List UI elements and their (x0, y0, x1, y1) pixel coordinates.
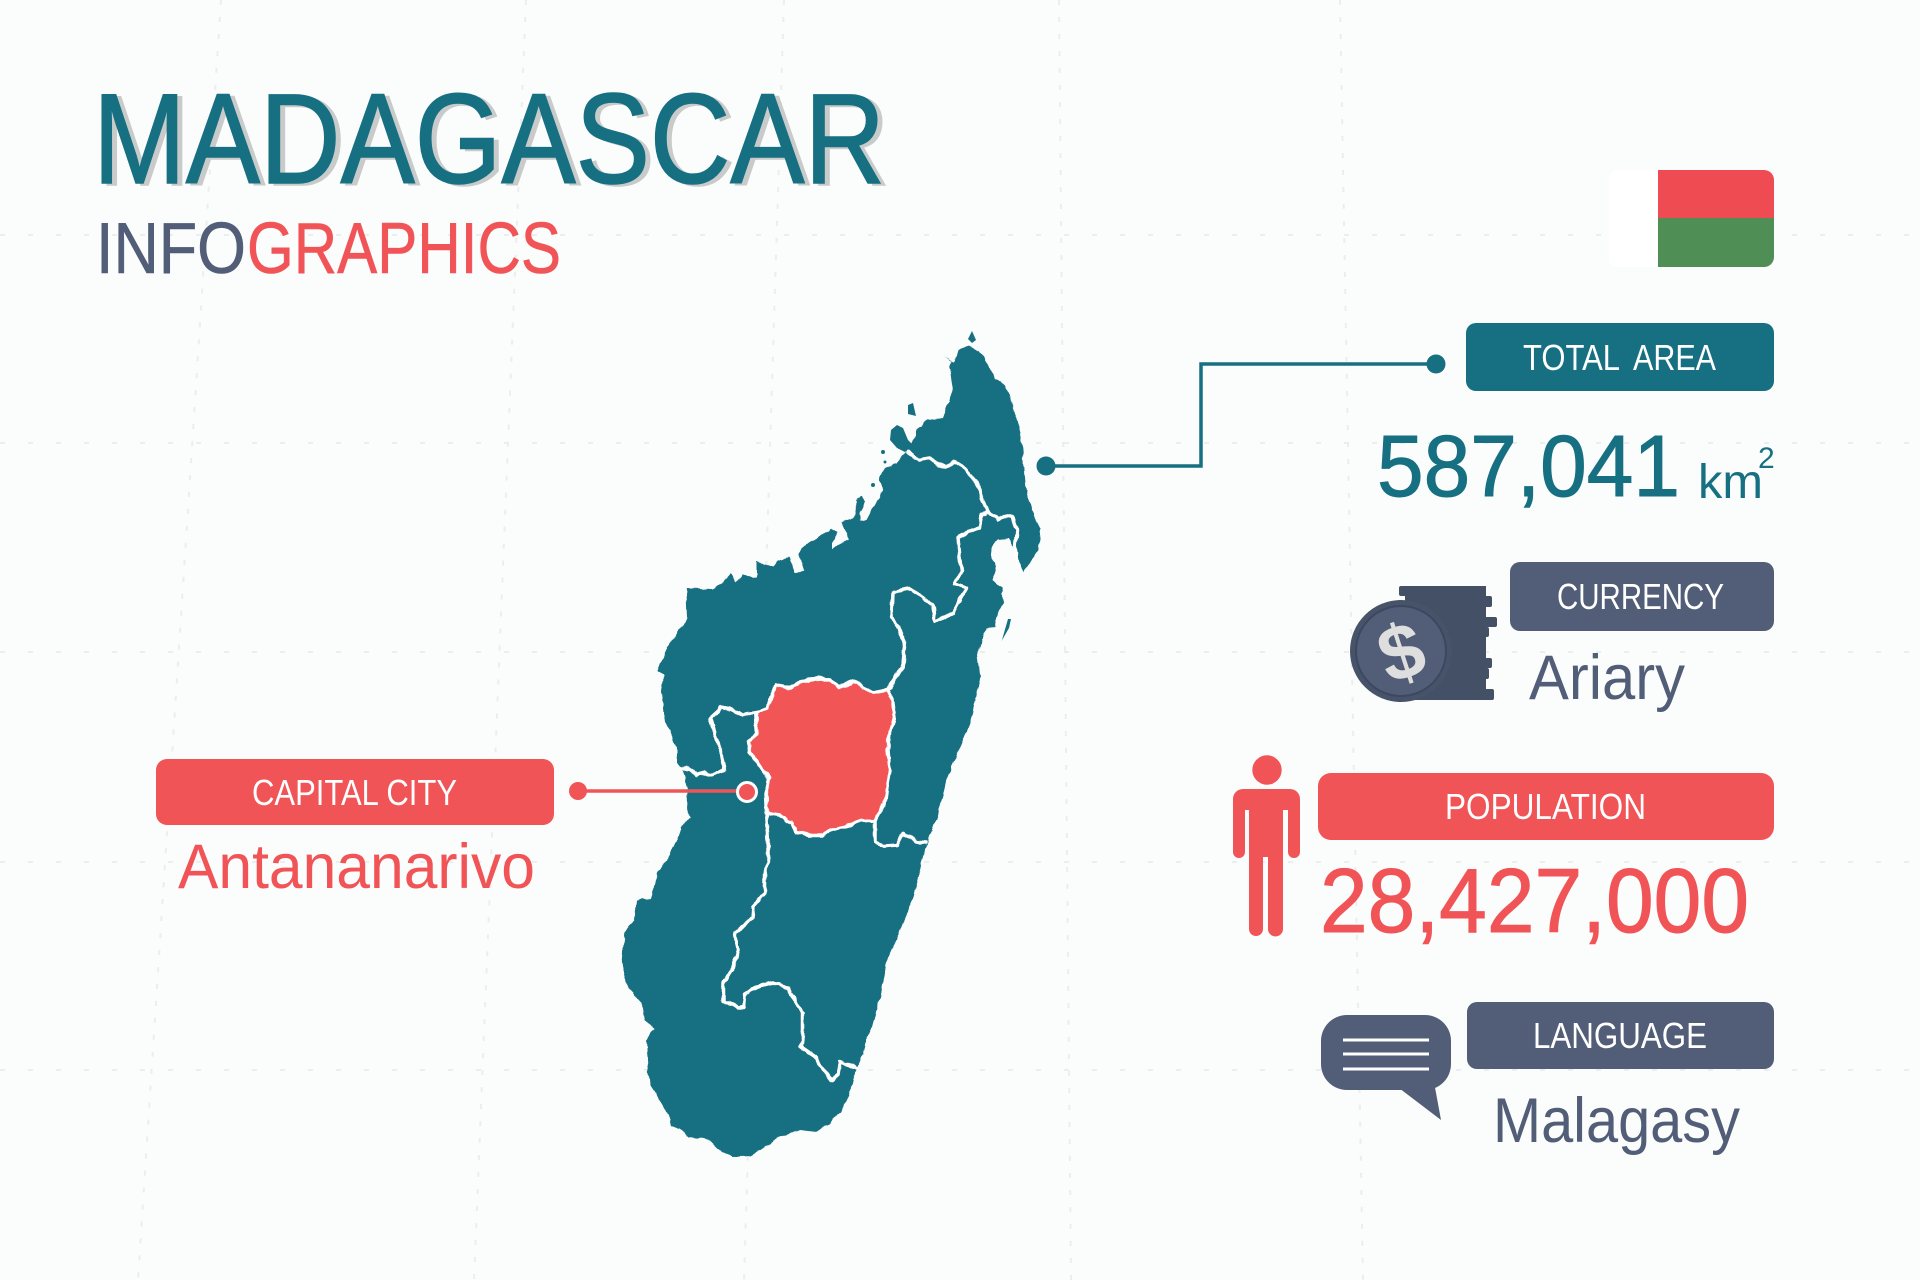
population panel (1233, 755, 1774, 952)
area unit (1698, 442, 1775, 509)
map: small islets (871, 450, 886, 487)
map: Nosy Mitsio islet (908, 403, 916, 416)
capital city callout (156, 759, 756, 902)
map: northern islet (968, 331, 976, 343)
area unit: km (1698, 456, 1763, 509)
title: MADAGASCAR: MADAGASCAR (93, 68, 885, 211)
currency label box (1510, 562, 1774, 631)
map: capital region highlighted (748, 678, 895, 835)
subtitle: INFOGRAPHICS: INFO (96, 209, 246, 289)
total area value: 587,041 (1377, 418, 1680, 515)
population label box (1318, 773, 1774, 840)
flag of Madagascar (1609, 170, 1774, 267)
language label box (1467, 1002, 1774, 1069)
total area label: AREA (1633, 337, 1716, 378)
icon: coins: $ (1367, 603, 1436, 701)
total area label box (1466, 323, 1774, 391)
language value: Malagasy (1493, 1086, 1740, 1156)
capital city label: CAPITAL CITY (252, 772, 457, 813)
map: Sainte Marie island (1001, 619, 1011, 642)
capital city label box (156, 759, 554, 825)
currency value: Ariary (1529, 643, 1685, 713)
map of Madagascar (622, 331, 1041, 1157)
title: MADAGASCAR: MADAGASCAR (98, 70, 890, 213)
language label: LANGUAGE (1533, 1015, 1707, 1056)
subtitle: INFOGRAPHICS (96, 209, 561, 289)
connector to map (1036, 354, 1446, 476)
icon: coins (1350, 586, 1497, 702)
map: main island (622, 345, 1041, 1157)
total area label: TOTAL (1523, 337, 1620, 378)
map: Nosy Be island (890, 425, 913, 452)
connector to capital (569, 782, 756, 802)
population label: POPULATION (1445, 786, 1646, 827)
language panel (1321, 1002, 1774, 1156)
subtitle: INFOGRAPHICS: GRAPHICS (247, 209, 561, 289)
icon: speech bubble (1321, 1015, 1451, 1120)
currency panel (1350, 562, 1774, 713)
total area callout (1036, 323, 1775, 515)
icon: person (1233, 755, 1300, 937)
map: region borders (682, 452, 1018, 1080)
currency label: CURRENCY (1557, 576, 1724, 617)
area unit: 2 (1758, 442, 1775, 475)
total area label (1523, 337, 1716, 378)
capital city name: Antananarivo (178, 832, 535, 902)
population value: 28,427,000 (1320, 851, 1749, 952)
